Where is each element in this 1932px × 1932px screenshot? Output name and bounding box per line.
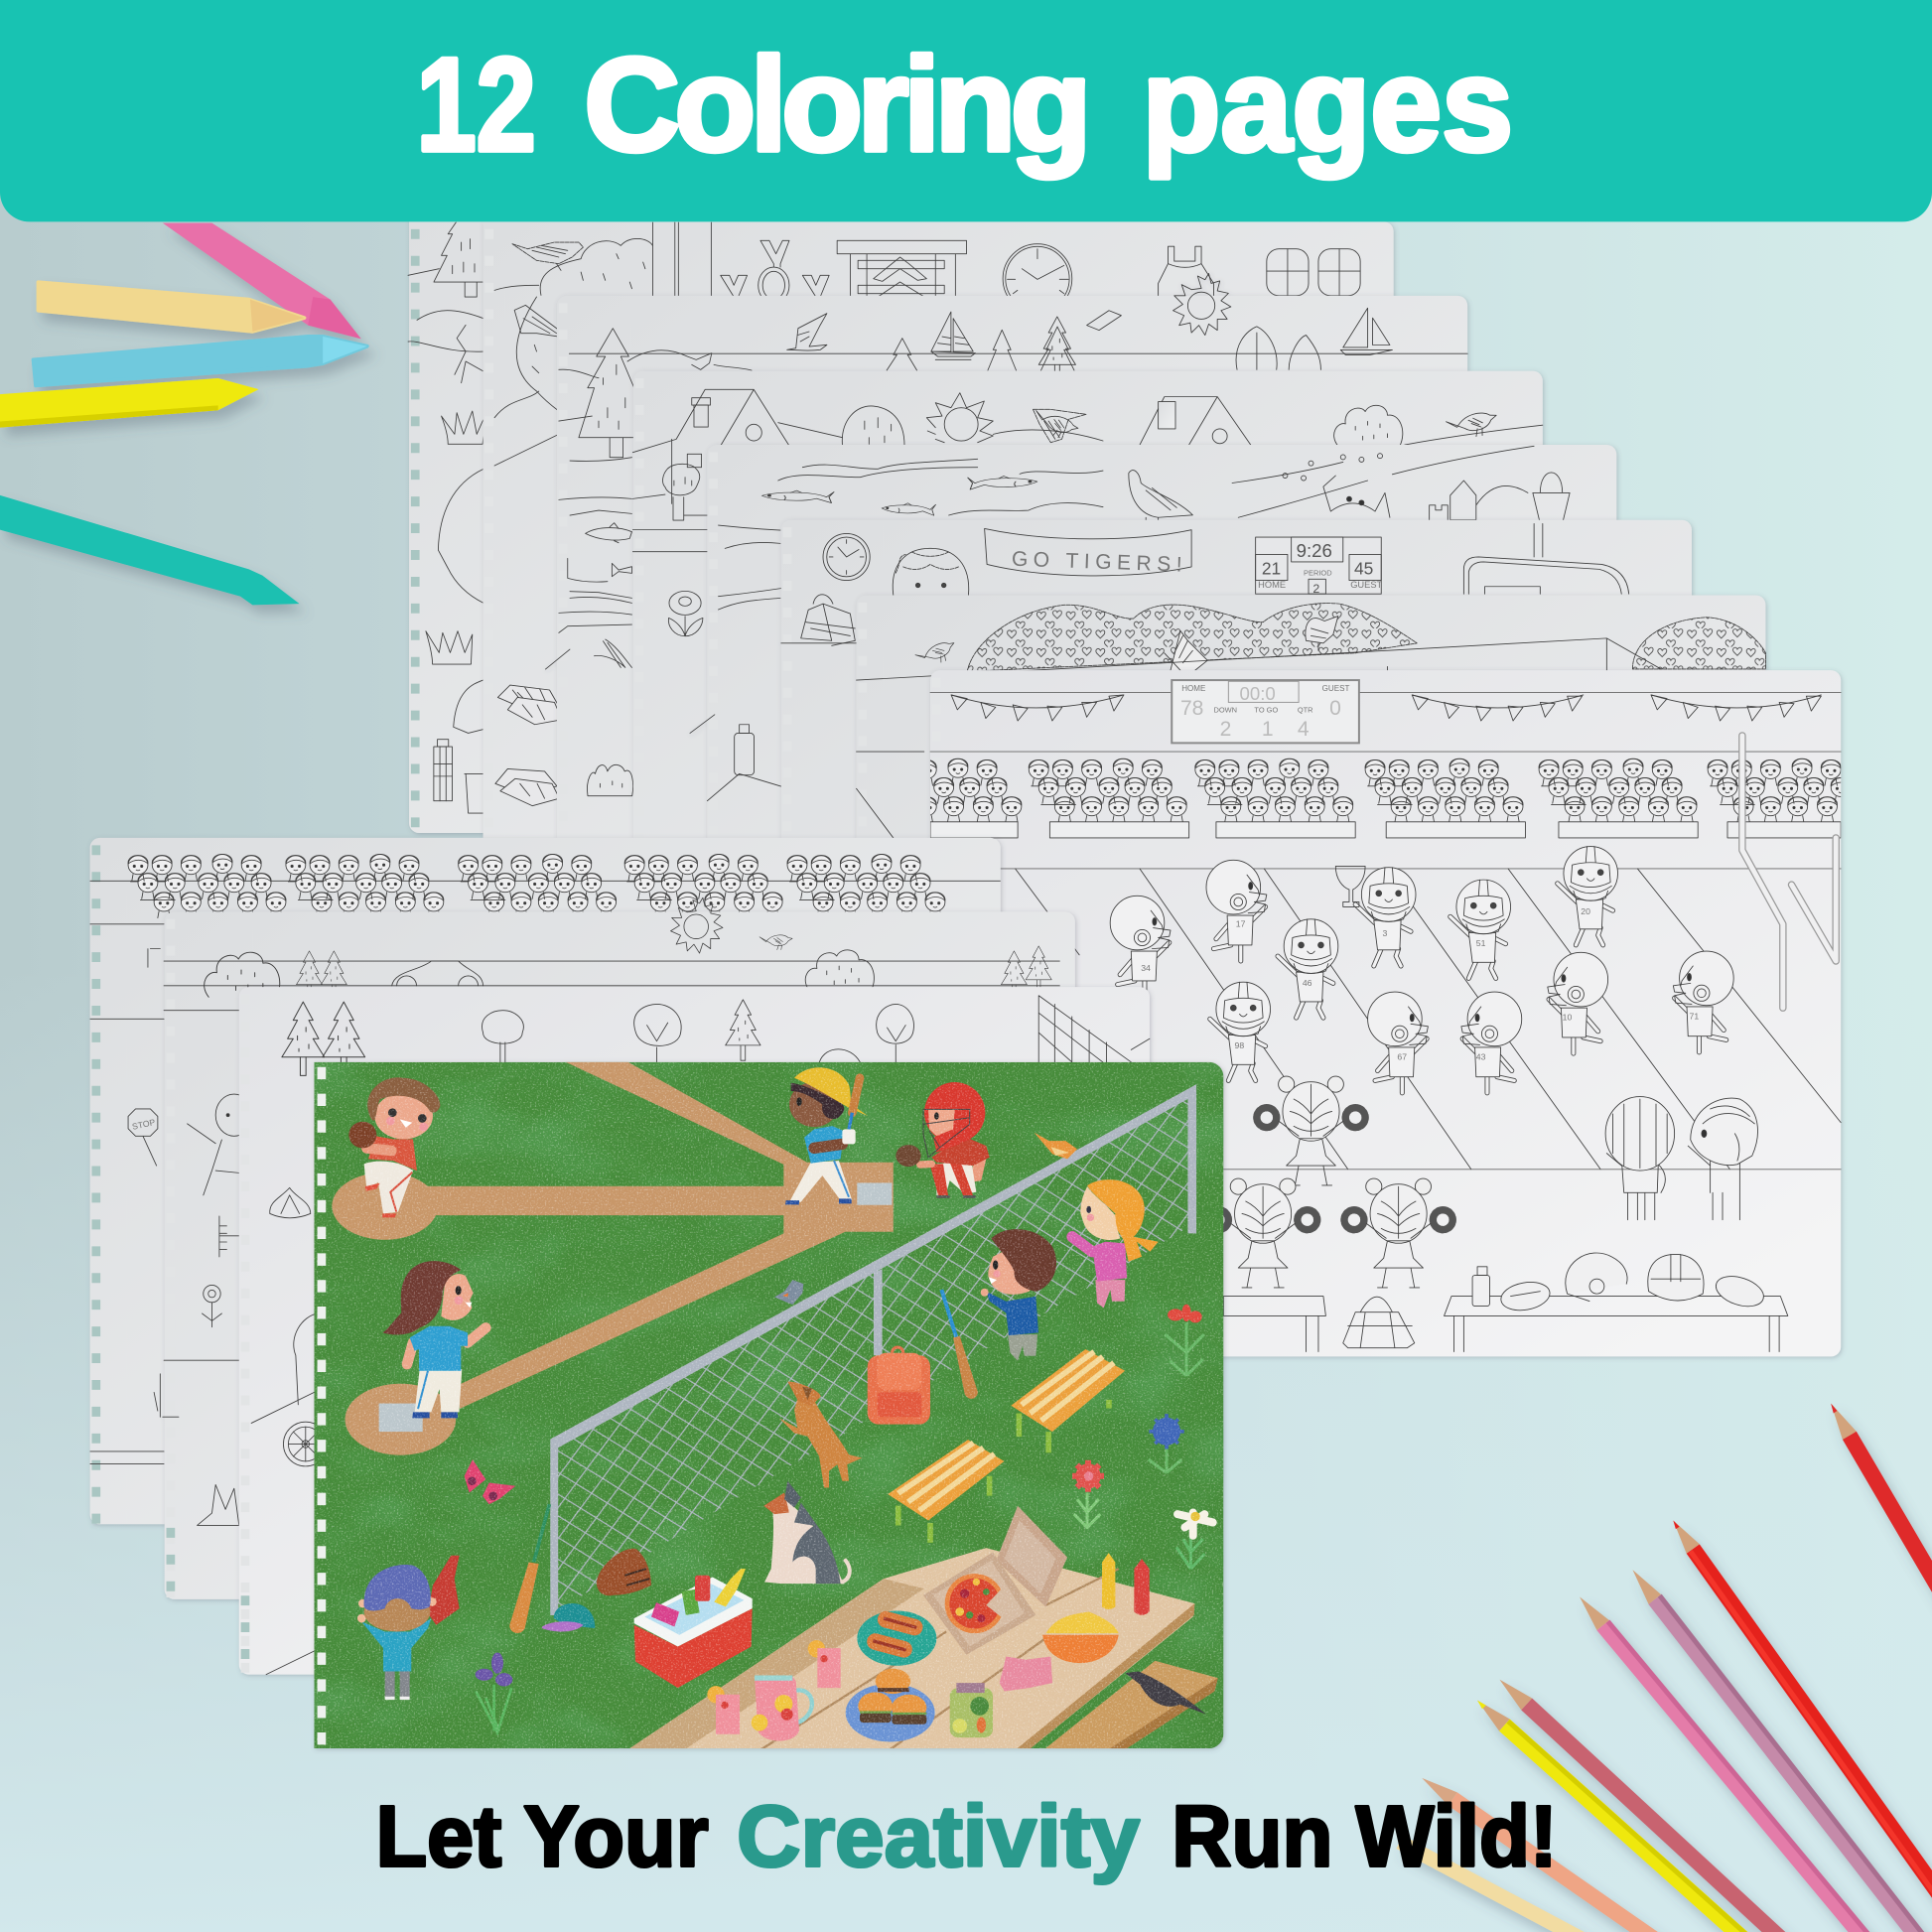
line art: clock, child, banner, scoreboard, backboard, duffel <box>781 523 1629 645</box>
coloring sheet: football stadium front page <box>864 670 1865 1356</box>
stadium scoreboard: HOME <box>1181 684 1206 693</box>
bird on fence rail <box>1035 1133 1077 1159</box>
pencil: pink <box>1580 1596 1890 1932</box>
coloring sheet: river, fish and beach <box>690 445 1616 1131</box>
iris flower <box>476 1652 512 1732</box>
football players: 3 <box>1382 928 1387 938</box>
child: catcher in red gear <box>896 1082 990 1198</box>
black crow <box>1125 1671 1206 1715</box>
pizza box and pizza <box>923 1506 1067 1655</box>
coloring sheet: road and kids, lower stack middle <box>163 897 1075 1599</box>
picnic table and bench <box>628 1548 1218 1749</box>
seated spotted dog <box>763 1481 850 1584</box>
line art: clock, child, banner, scoreboard, backboard, duffel: 9:26 <box>1297 540 1332 561</box>
stadium scoreboard: 00:0 <box>1240 683 1276 704</box>
stadium scoreboard <box>1172 680 1359 743</box>
pencil: mauve <box>1632 1570 1932 1932</box>
pencil: yellow <box>1477 1701 1765 1932</box>
leaning baseball bat <box>941 1290 978 1399</box>
crayon: yellow <box>0 378 259 428</box>
line art: clock, child, banner, scoreboard, backboard, duffel: PERIOD <box>1304 569 1332 578</box>
line art: clock, child, banner, scoreboard, backboard, duffel: 2 <box>1312 582 1319 596</box>
bases <box>379 1182 892 1432</box>
coloring sheet: crowd, lower stack back <box>90 838 1001 1524</box>
football players: 10 <box>1563 1013 1573 1023</box>
crayons <box>0 223 367 605</box>
crayon: pink <box>163 223 361 339</box>
spiral binding holes <box>318 1067 325 1748</box>
stadium scoreboard: TO GO <box>1254 705 1278 714</box>
title: 12 <box>416 31 536 179</box>
crayon: blue <box>34 337 367 385</box>
tagline: Run Wild! <box>1172 1789 1558 1885</box>
stadium scoreboard: 78 <box>1180 697 1203 720</box>
line art: houses, bushes, sun, birds, tree, flower <box>632 389 1543 636</box>
plates of hot dogs and burgers <box>846 1609 936 1741</box>
stadium scoreboard: 2 <box>1220 718 1231 741</box>
child: pitcher with glove <box>348 1077 440 1217</box>
pitcher, glasses and pickle jar <box>707 1640 993 1740</box>
football players: 34 <box>1141 963 1151 973</box>
football players: 67 <box>1397 1051 1407 1061</box>
football players: 46 <box>1303 978 1312 988</box>
crayon: pale yellow <box>38 282 305 332</box>
chips bowl, napkin and condiments <box>1000 1553 1150 1691</box>
small blue bird <box>774 1280 803 1305</box>
full colour baseball page <box>314 1061 1223 1749</box>
infield dirt paths <box>332 1061 894 1455</box>
title <box>416 31 1513 179</box>
line art: clock, child, banner, scoreboard, backboard, duffel: 21 <box>1262 558 1281 578</box>
header banner <box>0 0 1932 221</box>
child: blond girl at fence <box>1072 1179 1159 1308</box>
fence rail and posts <box>550 1084 1196 1615</box>
tagline: Let Your <box>376 1789 709 1885</box>
garden flowers <box>1072 1414 1213 1569</box>
child: girl running to base <box>382 1261 485 1418</box>
tagline <box>376 1789 1558 1885</box>
stadium scoreboard: GUEST <box>1322 684 1349 693</box>
chain-link fence net <box>553 1089 1190 1614</box>
title: Coloring <box>584 31 1092 179</box>
park bench right <box>1011 1349 1125 1452</box>
coloring sheet: trophies, clock and hills <box>483 221 1394 908</box>
coloring sheet: flowering hedges <box>857 595 1765 1282</box>
title: pages <box>1142 31 1513 179</box>
brown dog jumping <box>779 1382 862 1487</box>
stadium scoreboard: 1 <box>1262 718 1274 741</box>
line art: clock, child, banner, scoreboard, backboard, duffel: HOME <box>1258 580 1286 590</box>
line art: bushes, pines, car, sun, bird, child, flower, grass <box>163 897 1059 1525</box>
pencil: bright red <box>1673 1520 1932 1925</box>
stadium scoreboard: QTR <box>1298 705 1313 714</box>
pencil: red far right <box>1831 1404 1932 1622</box>
pencil: pale yellow <box>1400 1842 1589 1932</box>
stadium scoreboard: 0 <box>1329 697 1341 720</box>
football players: 71 <box>1690 1011 1699 1021</box>
bunting flags <box>951 695 1821 721</box>
pencil: rose <box>1499 1680 1799 1932</box>
crowd in the stands <box>864 759 1865 838</box>
football players: 98 <box>1235 1040 1244 1050</box>
stadium scoreboard: DOWN <box>1213 705 1237 714</box>
child: dark-haired boy at fence <box>981 1229 1056 1361</box>
grass field <box>314 1062 1223 1748</box>
line art: clock, child, banner, scoreboard, backboard, duffel: GO TIGERS! <box>1012 548 1187 577</box>
stadium scoreboard: 4 <box>1298 718 1310 741</box>
line art: pine, hill, deer, grass, fox, thermos <box>408 222 485 813</box>
cheerleaders <box>1208 1076 1452 1288</box>
line art: crowd rows, stop sign, stand lines: STOP <box>131 1117 156 1132</box>
flower: red tulip <box>1165 1305 1204 1376</box>
child: batter in yellow helmet <box>785 1067 868 1204</box>
coloring sheet: park and net, lower stack front <box>239 987 1150 1675</box>
child: fan with foam finger <box>357 1556 460 1700</box>
spectator kids <box>1605 1097 1757 1220</box>
line art: bird, hedges, butterfly, wall <box>857 604 1765 838</box>
line art: birds, bush, medal, shelf, clock, vest, barrels, shoes <box>494 222 1360 806</box>
football goal post <box>1742 736 1836 1008</box>
line art: crowd rows, stop sign, stand lines <box>90 854 1001 1463</box>
coloring sheet: houses and sun <box>632 371 1543 1057</box>
football players: 43 <box>1476 1051 1486 1061</box>
line art: pines, trees, net, lotus, wheel <box>251 996 1150 1675</box>
butterfly <box>465 1459 515 1504</box>
tagline: Creativity <box>737 1789 1140 1885</box>
line art: river, fish, gull, crab, sandcastle, bucket, bottle <box>690 446 1570 801</box>
coloring sheet: gym and scoreboard <box>781 520 1692 1206</box>
pencil: salmon <box>1422 1778 1676 1932</box>
coloured pencils <box>1400 1404 1932 1932</box>
football players <box>1110 847 1733 1093</box>
park bench left <box>888 1440 1004 1543</box>
baseball bat, cap and mitt <box>509 1504 651 1633</box>
football players: 20 <box>1581 906 1590 916</box>
benches with gear <box>1223 1253 1788 1351</box>
stadium structure lines and field stripes <box>930 692 1841 1170</box>
coloring sheet: forest scene far back <box>408 147 1319 833</box>
line art: pines, gull, boats, trees, fish, dragonfly <box>545 274 1467 796</box>
line art: clock, child, banner, scoreboard, backboard, duffel: GUEST <box>1350 580 1383 590</box>
football players: 17 <box>1236 918 1246 928</box>
crayon: teal <box>0 495 300 605</box>
line art: clock, child, banner, scoreboard, backboard, duffel: 45 <box>1354 558 1373 578</box>
red cooler with drinks <box>634 1569 753 1688</box>
football players: 51 <box>1476 938 1486 948</box>
orange backpack <box>868 1347 930 1425</box>
coloring sheet: lake, sailboats and pines <box>545 274 1467 982</box>
speckle texture <box>314 1062 1223 1748</box>
